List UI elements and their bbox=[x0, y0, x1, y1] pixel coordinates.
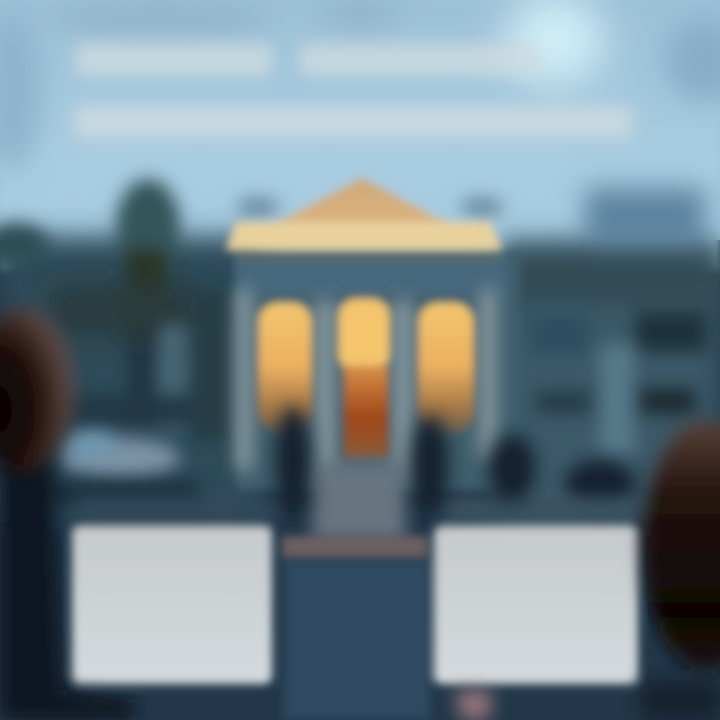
palm tree bbox=[116, 179, 180, 271]
centre glowing window bbox=[338, 298, 390, 372]
red door bbox=[344, 366, 388, 458]
pediment bbox=[272, 178, 452, 226]
title: illegible blurred heading lines bbox=[74, 44, 632, 138]
right glowing window bbox=[418, 302, 474, 432]
parked cars bbox=[10, 395, 640, 524]
foreground person right bbox=[640, 420, 720, 720]
pink sleeve below right card bbox=[456, 690, 492, 720]
left glowing window bbox=[258, 302, 312, 432]
building body bbox=[236, 250, 520, 490]
panel: left card, illegible text bbox=[72, 526, 272, 684]
steps bbox=[312, 462, 406, 542]
entablature bbox=[226, 222, 502, 250]
sky background bbox=[0, 0, 720, 270]
brick band bbox=[282, 536, 428, 558]
right distant cloud-tower bbox=[585, 188, 705, 248]
background trees and buildings bbox=[0, 179, 720, 526]
building: columned facade with pediment bbox=[226, 178, 520, 490]
standing figures bbox=[275, 406, 536, 518]
foreground person left bbox=[0, 308, 135, 720]
panel: right card, illegible text bbox=[434, 526, 638, 684]
columns bbox=[236, 290, 496, 480]
walkway bbox=[284, 560, 430, 720]
